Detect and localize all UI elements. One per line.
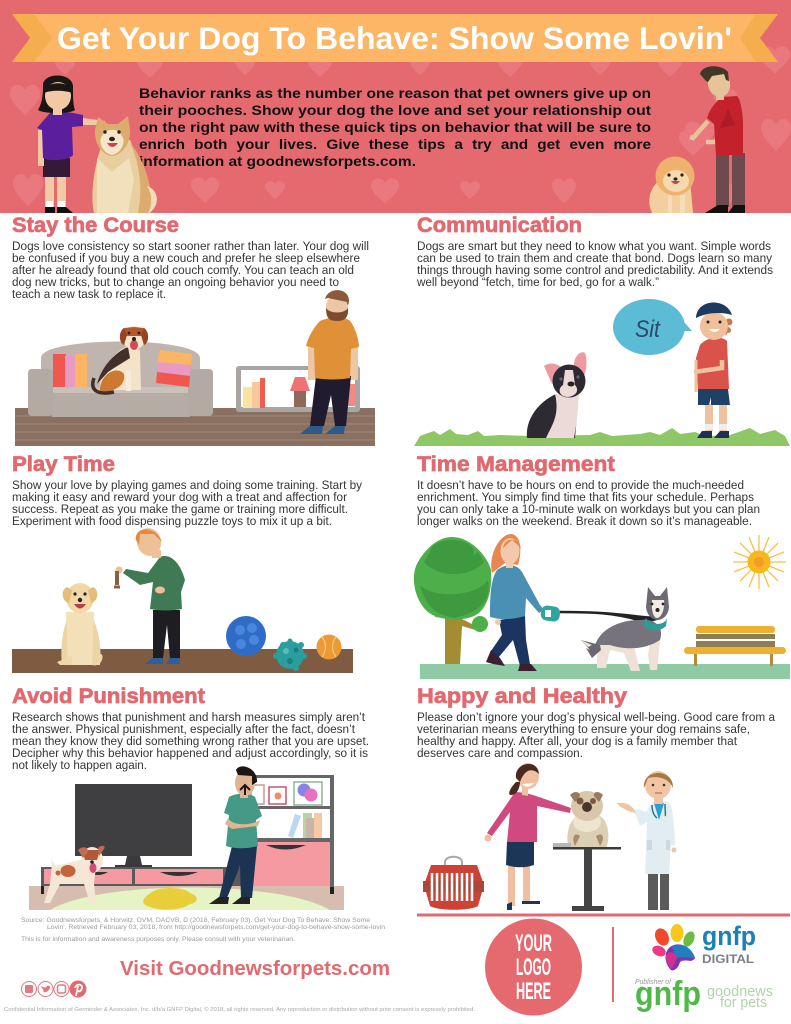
icon: sun [733, 535, 786, 589]
heading: Avoid Punishment [12, 684, 205, 708]
logo placeholder circle: YOUR [515, 930, 552, 957]
social icons [22, 980, 86, 998]
heading: Time Management [417, 452, 615, 476]
body text: healthy and happy. After all, your dog is a family member that [417, 734, 738, 748]
body text: can be used to train them and create that bond. Dogs learn so many [417, 251, 773, 265]
publisher wordmark: Publisher of [635, 979, 672, 986]
body text: Please don’t ignore your dog’s physical well-being. Good care from a [417, 710, 775, 724]
illustration: man, dog and toys [12, 526, 353, 673]
body text: teach a new task to replace it. [12, 287, 166, 301]
publisher wordmark: for pets [720, 994, 767, 1011]
panel: Stay the Course [12, 213, 375, 446]
intro text: their pooches. Show your dog the love and set your relationship out [139, 103, 651, 119]
gnfp digital wordmark [702, 921, 756, 966]
title ribbon [12, 14, 778, 62]
body text [12, 239, 369, 301]
panel: Time Management [414, 452, 790, 679]
publisher wordmark: goodnews [707, 983, 773, 1000]
body text: dog new tricks, but to change an ongoing behavior you need to [12, 275, 339, 289]
body text: you can only take a 10-minute walk on workdays but you can plan [417, 502, 760, 516]
body text: It doesn’t have to be hours on end to provide the much-needed [417, 478, 744, 492]
body text: longer walks on the weekend. Break it down so it’s manageable. [417, 514, 752, 528]
body text: the answer. Physical punishment, especially after the fact, doesn’t [12, 722, 356, 736]
body text: well beyond “fetch, time for bed, go for a walk.” [416, 275, 659, 289]
body text: veterinarian means everything to ensure your dog remains safe, [417, 722, 750, 736]
publisher wordmark [635, 975, 773, 1013]
body text: Dogs are smart but they need to know what you want. Simple words [417, 239, 771, 253]
logo placeholder circle: LOGO [516, 954, 551, 981]
confidentiality notice: Confidential Information of Germinder & Associates, Inc. d/b/a GNFP Digital, © 2018, all rights reserved. Any reproduction or distribution without prior consent is expressly prohibited. [4, 1006, 475, 1013]
heading: Play Time [12, 452, 115, 476]
body text [417, 478, 760, 528]
publisher wordmark: gnfp [635, 975, 701, 1013]
body text: mean they know they did something wrong rather that you are upset. [12, 734, 369, 748]
illustration: girl with akita dog [37, 76, 157, 213]
illustration: boy commanding dog [414, 299, 790, 446]
gnfp digital wordmark: DIGITAL [702, 954, 754, 966]
source text: Lovin'. Retrieved February 03, 2018, from http://goodnewsforpets.com/get-your-dog-to-behave-show-some-lovin [47, 924, 385, 931]
logo placeholder circle [485, 918, 582, 1016]
body text: after he already found that old couch comfy. You can teach an old [12, 263, 354, 277]
source text: This is for information and awareness purposes only. Please consult with your veterinarian. [21, 936, 295, 943]
visit link: Visit Goodnewsforpets.com [120, 958, 390, 980]
speech text: Sit [635, 316, 661, 343]
heading: Communication [417, 213, 582, 237]
body text: making it easy and reward your dog with a treat and affection for [12, 490, 347, 504]
footer logo area [417, 914, 790, 1016]
body text [12, 478, 363, 528]
body text: deserves care and compassion. [417, 746, 583, 760]
intro text: on the right paw with these quick tips on behavior that will be sure to [139, 120, 651, 136]
illustration: dog on couch and man [15, 290, 375, 446]
heading: Happy and Healthy [417, 684, 627, 708]
body text: not likely to happen again. [12, 758, 147, 772]
heading: Stay the Course [12, 213, 179, 237]
icon: colourful paw logo [651, 924, 697, 970]
body text: Decipher why this behavior happened and adjust accordingly, so it is [12, 746, 368, 760]
illustration: vet visit [423, 763, 676, 911]
source text: Source: Goodnewsforpets, & Horwitz, DVM, DACVB, D (2018, February 03). Get Your Dog To Behave: Show Some [21, 917, 370, 924]
body text: Experiment with food dispensing puzzle toys to mix it up a bit. [12, 514, 332, 528]
body text: things through having some control and predictability. And it extends [417, 263, 773, 277]
intro text: enrich both your lives. Give these tips a try and get even more [139, 137, 651, 153]
gnfp digital wordmark: gnfp [702, 921, 756, 951]
body text [417, 710, 775, 760]
panel: Avoid Punishment [12, 684, 385, 943]
body text: be confused if you buy a new couch and prefer he sleep elsewhere [12, 251, 360, 265]
intro text: Behavior ranks as the number one reason that pet owners give up on [139, 86, 651, 102]
header banner panel [0, 0, 791, 213]
body text: success. Repeat as you make the game or training more difficult. [12, 502, 348, 516]
body text [12, 710, 369, 772]
illustration: man with pomeranian [649, 66, 745, 213]
body text: Dogs love consistency so start sooner rather than later. Your dog will [12, 239, 369, 253]
title: Get Your Dog To Behave: Show Some Lovin' [57, 20, 732, 56]
logo placeholder circle: HERE [516, 978, 551, 1005]
intro text [139, 86, 651, 170]
panel: Communication [414, 213, 790, 446]
panel: Play Time [12, 452, 363, 673]
body text: Research shows that punishment and harsh measures simply aren’t [12, 710, 366, 724]
intro text: information at goodnewsforpets.com. [139, 154, 416, 170]
body text: Show your love by playing games and doing some training. Start by [12, 478, 363, 492]
illustration: woman walking husky [414, 534, 790, 679]
illustration: living room with dog and man [29, 766, 344, 910]
body text: enrichment. You simply find time that fits your schedule. Perhaps [417, 490, 754, 504]
panel: Happy and Healthy [417, 684, 775, 911]
source text [21, 917, 385, 943]
body text [416, 239, 773, 289]
